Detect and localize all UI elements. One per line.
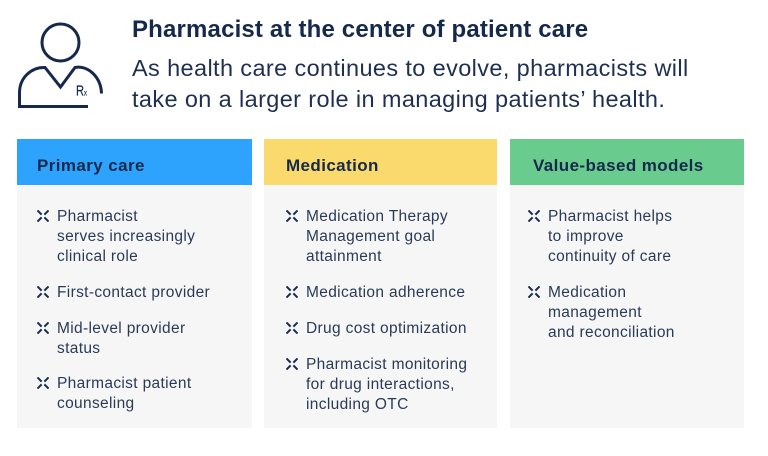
list item: first-contact provider: First-contact provider [57, 284, 210, 301]
header: primary care: Primary care [37, 156, 145, 175]
panel: primary care [17, 139, 252, 428]
intro text: take on a larger role in managing patients’ health. [132, 86, 665, 112]
list item: reconciliation: and reconciliation [548, 324, 675, 341]
list item: continuity of care: continuity of care [548, 248, 671, 265]
header: value-based models: Value-based models [533, 156, 704, 175]
intro text [132, 55, 689, 112]
list item: therapy management: attainment [306, 248, 382, 265]
list item: therapy management [286, 208, 448, 265]
header: medication: Medication [286, 156, 379, 175]
intro text: As health care continues to evolve, pharmacists will [132, 55, 689, 81]
list item: therapy management: Management goal [306, 228, 435, 245]
panel: value-based models [510, 139, 744, 428]
icon: pharmacist [18, 22, 103, 108]
list item: therapy management: Medication Therapy [306, 208, 448, 225]
list item: continuity of care: Pharmacist helps [548, 208, 672, 225]
title: Pharmacist at the center of patient care [132, 16, 588, 43]
icon: pharmacist: Rx [76, 82, 87, 100]
list item: clinical role: serves increasingly [57, 228, 195, 245]
list item: monitoring: Pharmacist monitoring [306, 356, 467, 373]
list item: monitoring: including OTC [306, 396, 409, 413]
list item: cost optimization: Drug cost optimization [306, 320, 467, 337]
list item: monitoring [286, 356, 467, 413]
list item: continuity of care [528, 208, 672, 265]
header: medication [264, 139, 497, 185]
list item: patient counseling: counseling [57, 395, 135, 412]
list item: patient counseling: Pharmacist patient [57, 375, 192, 392]
list item: mid-level provider: status [57, 340, 100, 357]
list item: clinical role [37, 208, 195, 265]
list item: clinical role: Pharmacist [57, 208, 138, 225]
list item: clinical role: clinical role [57, 248, 138, 265]
header: value-based models [510, 139, 744, 185]
panel: medication [264, 139, 497, 428]
list item: monitoring: for drug interactions, [306, 376, 455, 393]
list item: adherence: Medication adherence [306, 284, 465, 301]
header: primary care [17, 139, 252, 185]
list item: reconciliation [528, 284, 675, 341]
list item: mid-level provider: Mid-level provider [57, 320, 185, 337]
list item: continuity of care: to improve [548, 228, 624, 245]
list item: patient counseling [37, 375, 192, 412]
list item: mid-level provider [37, 320, 185, 357]
list item: reconciliation: management [548, 304, 642, 321]
list item: reconciliation: Medication [548, 284, 626, 301]
